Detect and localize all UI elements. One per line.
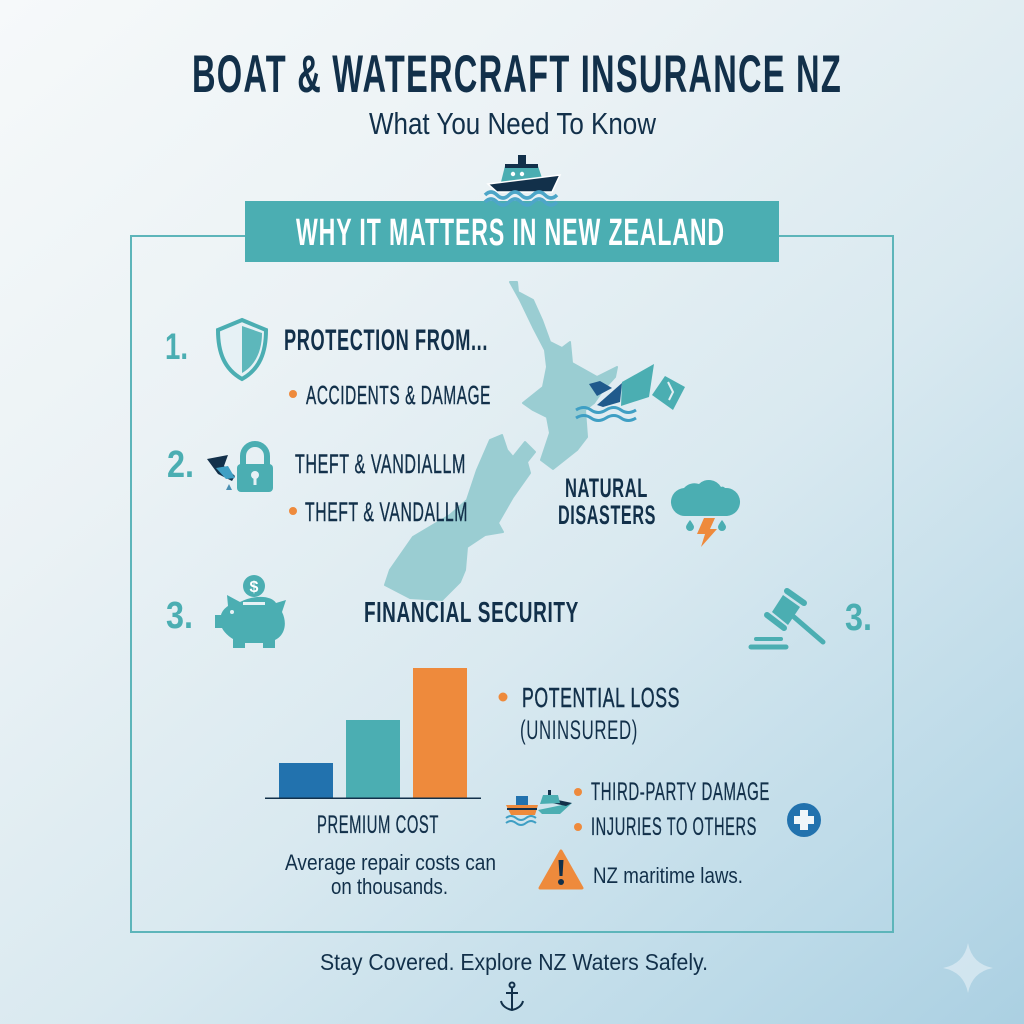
heading banner: WHY IT MATTERS IN NEW ZEALAND xyxy=(296,212,725,254)
bar chart xyxy=(265,668,481,799)
bullet: third party xyxy=(574,778,770,806)
icon: piggy bank xyxy=(215,575,286,648)
label: natural disasters xyxy=(558,473,656,530)
icon: anchor xyxy=(501,982,523,1010)
item 1 number: 1. xyxy=(165,326,188,367)
note: maritime laws: NZ maritime laws. xyxy=(593,863,743,888)
heading: protection: PROTECTION FROM... xyxy=(284,324,488,357)
decorative star xyxy=(943,943,993,993)
bullet: accidents: ACCIDENTS & DAMAGE xyxy=(306,380,491,410)
icon: broken boat xyxy=(207,455,235,490)
icon: medical plus xyxy=(787,803,821,837)
potential loss: POTENTIAL LOSS xyxy=(522,682,680,713)
icon: storm cloud xyxy=(671,480,740,547)
item 2 number: 2. xyxy=(167,444,194,486)
icon: warning triangle xyxy=(540,851,582,888)
note: repair costs xyxy=(285,850,496,899)
content frame xyxy=(131,236,893,932)
chart label: PREMIUM COST xyxy=(317,811,439,839)
icon: shield xyxy=(218,320,266,379)
icon: colliding boats xyxy=(506,790,572,825)
bullet: injuries: INJURIES TO OTHERS xyxy=(591,813,757,841)
bullet: injuries xyxy=(574,813,757,841)
subtitle: What You Need To Know xyxy=(369,106,657,141)
heading: financial security: FINANCIAL SECURITY xyxy=(364,597,579,629)
bullet: third party: THIRD-PARTY DAMAGE xyxy=(591,778,770,806)
note: repair costs: on thousands. xyxy=(331,874,448,899)
potential loss: (UNINSURED) xyxy=(520,715,638,745)
map: New Zealand xyxy=(385,282,617,600)
bullet: theft: THEFT & VANDALLM xyxy=(305,497,468,527)
heading banner xyxy=(245,201,779,262)
bullet: theft xyxy=(289,497,468,527)
icon: gavel xyxy=(751,591,823,647)
footer: Stay Covered. Explore NZ Waters Safely. xyxy=(320,949,708,975)
bullet: accidents xyxy=(289,380,491,410)
icon: ship on waves xyxy=(485,155,560,205)
icon: sinking boat xyxy=(576,364,685,420)
item 3 number right: 3. xyxy=(845,597,872,639)
note: repair costs: Average repair costs can xyxy=(285,850,496,875)
icon: piggy bank: $ xyxy=(250,579,259,596)
potential loss xyxy=(498,682,680,745)
icon: padlock xyxy=(237,444,273,492)
item 3 number left: 3. xyxy=(166,595,193,637)
label: natural disasters: NATURAL xyxy=(565,473,648,503)
label: natural disasters: DISASTERS xyxy=(558,500,656,530)
label: theft line: THEFT & VANDIALLM xyxy=(295,449,466,479)
